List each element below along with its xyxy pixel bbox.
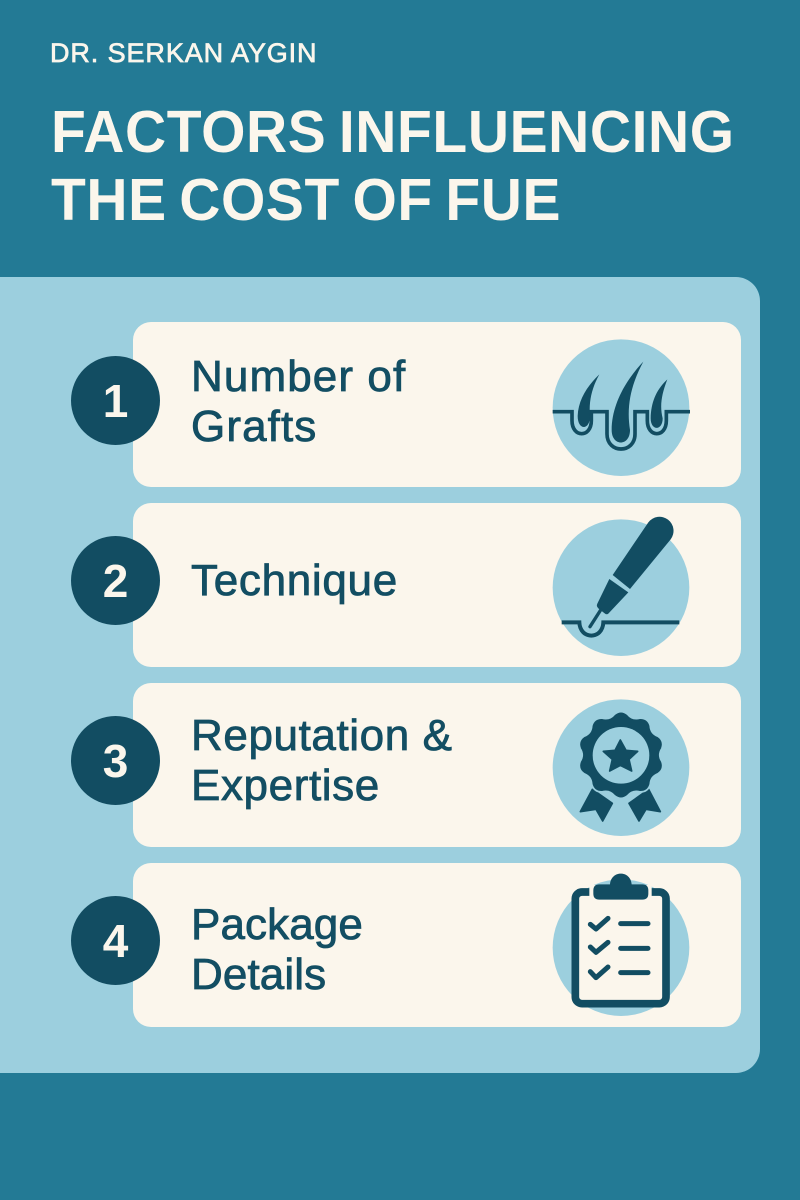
subtitle: author name: DR. SERKAN AYGIN (50, 38, 317, 68)
label: number of grafts: Grafts (191, 402, 317, 451)
label: number of grafts (191, 352, 406, 451)
number badge 3 (71, 716, 160, 805)
number badge 4 (71, 896, 160, 985)
label: reputation and expertise (191, 711, 453, 810)
card 3: reputation and expertise (133, 683, 741, 847)
number badge 4: 4 (103, 915, 128, 967)
number badge 2 (71, 536, 160, 625)
label: package details (191, 900, 363, 999)
label: reputation and expertise: Reputation & (191, 711, 453, 760)
title: THE COST OF FUE (51, 166, 561, 232)
number badge 1 (71, 356, 160, 445)
title: FACTORS INFLUENCING (51, 99, 735, 165)
label: package details: Package (191, 900, 363, 949)
label: number of grafts: Number of (191, 352, 406, 401)
icon: extraction pen (552, 516, 690, 656)
card 4: package details (133, 863, 741, 1027)
icon: hair follicles (552, 339, 690, 476)
number badge 2: 2 (103, 555, 128, 607)
title (51, 99, 735, 232)
icon: award rosette (552, 699, 690, 836)
number badge 1: 1 (103, 375, 128, 427)
card 1: number of grafts (133, 322, 741, 487)
icon: clipboard checklist (552, 874, 690, 1016)
panel: factors list (0, 277, 760, 1073)
card 2: technique (133, 503, 741, 667)
label: package details: Details (191, 950, 326, 999)
number badge 3: 3 (103, 735, 128, 787)
label: reputation and expertise: Expertise (191, 761, 380, 810)
label: technique: Technique (191, 556, 398, 605)
